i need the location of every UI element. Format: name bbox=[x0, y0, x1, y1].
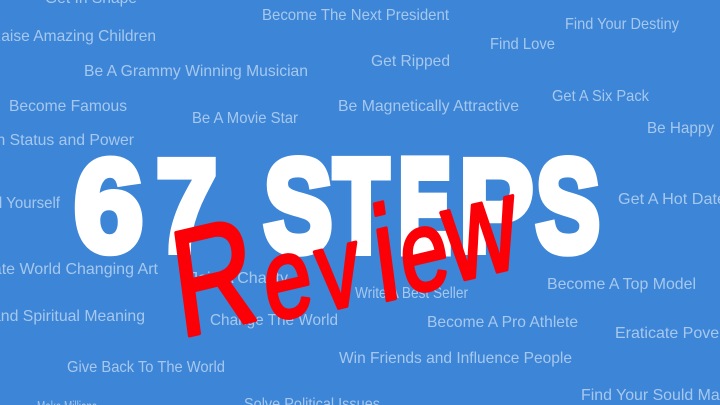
background goal phrases: Be A Movie Star bbox=[192, 110, 299, 127]
background goal phrases: Become The Next President bbox=[262, 7, 450, 24]
title: 67 STEPS: 6 bbox=[74, 133, 143, 280]
title: 67 STEPS: S bbox=[264, 133, 332, 279]
background goal phrases: Win Friends and Influence People bbox=[339, 350, 572, 367]
title: 67 STEPS: E bbox=[399, 133, 451, 279]
background goal phrases: Be Happy bbox=[647, 120, 714, 137]
background goal phrases: Be Magnetically Attractive bbox=[338, 98, 519, 115]
handwritten word: Review: w bbox=[433, 147, 527, 312]
background goal phrases: Find Your Destiny bbox=[565, 16, 679, 33]
background goal phrases: Join A Charity bbox=[190, 270, 288, 287]
handwritten word: Review: e bbox=[255, 208, 319, 347]
background goal phrases: Get A Six Pack bbox=[552, 88, 650, 105]
background goal phrases: Write A Best Seller bbox=[355, 285, 469, 302]
background goal phrases: Find Love bbox=[490, 36, 555, 53]
handwritten word: Review: e bbox=[391, 181, 455, 320]
handwritten word: Review: R bbox=[162, 184, 265, 370]
title: 67 STEPS: P bbox=[459, 132, 533, 279]
background goal phrases: Be A Grammy Winning Musician bbox=[84, 63, 308, 80]
title: 67 STEPS: 7 bbox=[156, 132, 217, 279]
background goal phrases: Become A Top Model bbox=[547, 276, 696, 293]
title: 67 STEPS: S bbox=[536, 133, 600, 280]
background goal phrases: Get Ripped bbox=[371, 53, 450, 70]
title: 67 STEPS: T bbox=[334, 133, 388, 279]
background goal phrases: Change The World bbox=[210, 312, 338, 329]
title: 67 STEPS bbox=[74, 132, 600, 280]
background goal phrases: Give Back To The World bbox=[67, 359, 225, 376]
handwritten word: Review: v bbox=[308, 199, 368, 337]
background goal phrases: Become A Pro Athlete bbox=[427, 314, 578, 331]
background goal phrases: Become Famous bbox=[9, 98, 127, 115]
handwritten word: Review: i bbox=[364, 178, 406, 331]
